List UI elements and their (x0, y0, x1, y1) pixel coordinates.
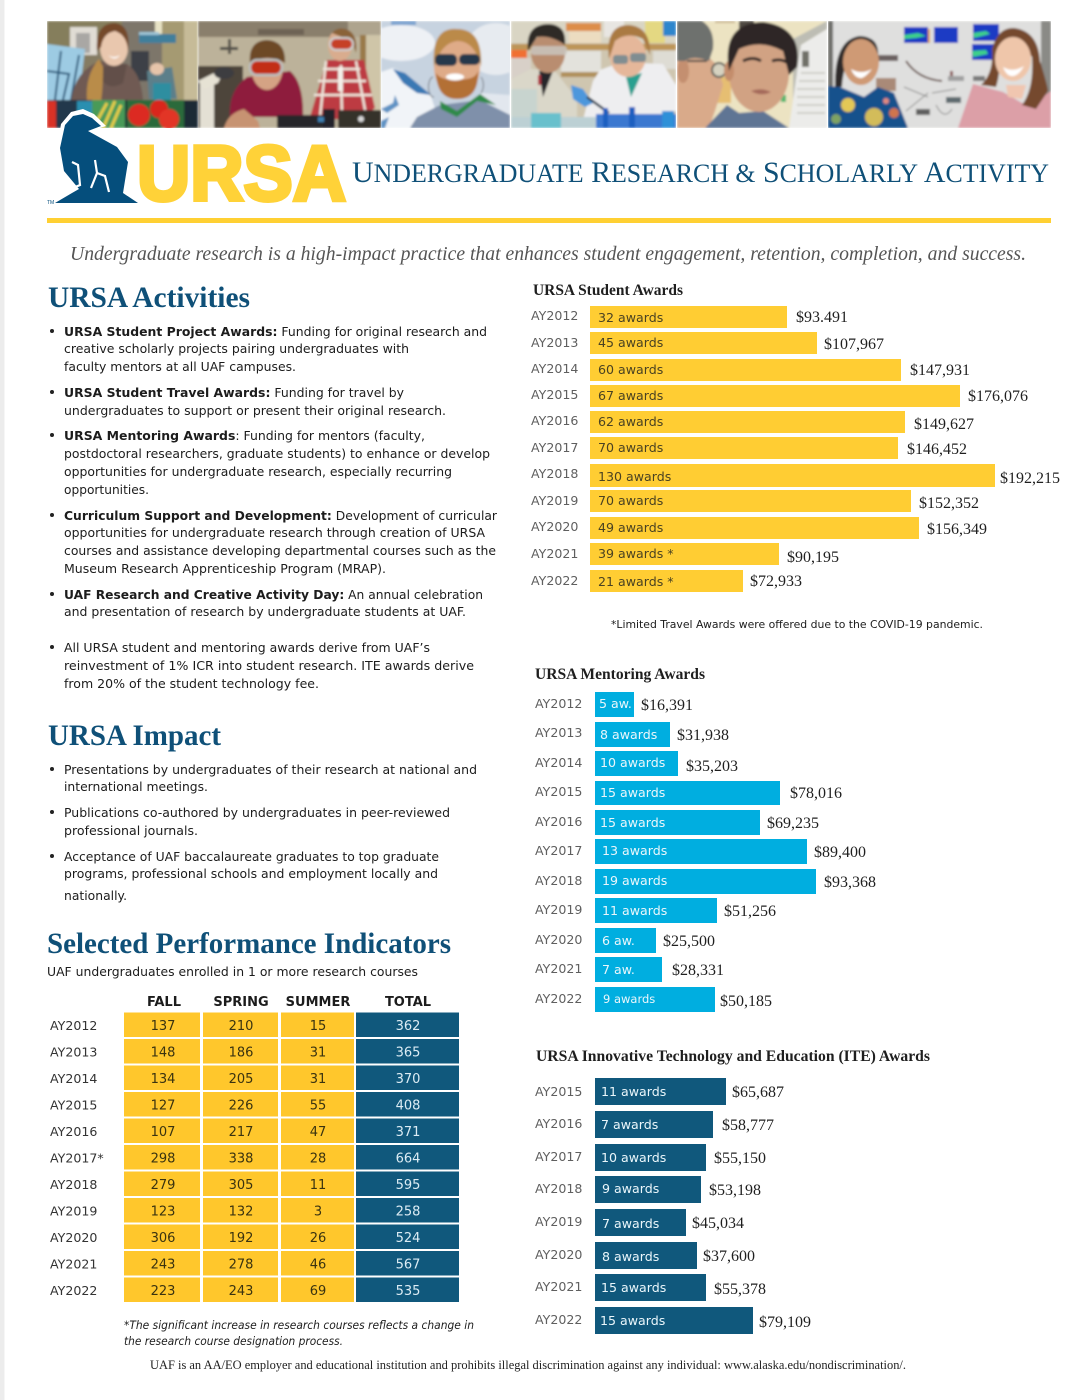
bar: AY2015: 67 awards (598, 388, 663, 403)
row: AY2016: 107 (151, 1125, 175, 1140)
bar: AY2018: AY2018 (535, 873, 582, 888)
bar: AY2020: 6 aw. (602, 933, 635, 948)
bar: AY2022: 21 awards * (598, 574, 674, 589)
bar: AY2022: 9 awards (603, 992, 655, 1006)
bar: AY2022: AY2022 (531, 573, 578, 588)
bar: AY2019: AY2019 (535, 1214, 582, 1229)
row: AY2018: AY2018 (50, 1177, 97, 1192)
bar: AY2021 (531, 543, 839, 566)
bar: AY2015 (535, 1078, 784, 1105)
bullet: Mentoring Awards: opportunities for undergraduate research, especially recurring (64, 464, 452, 479)
bar: AY2019 (531, 490, 979, 512)
bullet: funding sources (50, 640, 474, 691)
row: AY2019: 132 (229, 1204, 253, 1220)
bar: AY2014: $35,203 (686, 758, 738, 775)
heading: URSA Impact: URSA Impact (48, 719, 221, 752)
row: AY2018: 305 (229, 1178, 253, 1193)
table header: TOTAL (385, 995, 431, 1010)
bar: AY2021: AY2021 (535, 1279, 582, 1294)
photo: mentor and student talking (677, 21, 827, 128)
tagline: Undergraduate research is a high-impact practice that enhances student engagement, retention, completion, and success. (70, 243, 1026, 265)
bar: AY2020: $25,500 (663, 933, 715, 950)
bar: AY2018: $93,368 (824, 874, 876, 891)
bar: AY2012 (535, 692, 693, 717)
row: AY2021: 243 (151, 1258, 175, 1272)
bar: AY2022: AY2022 (535, 1312, 582, 1327)
row: AY2016: 371 (396, 1125, 420, 1140)
row: AY2015: AY2015 (50, 1098, 97, 1112)
table header: SUMMER (286, 995, 350, 1010)
row: AY2012: 15 (310, 1019, 326, 1034)
bullet: Student Project Awards: faculty mentors at all UAF campuses. (64, 359, 296, 374)
bar: AY2022 (535, 1307, 811, 1334)
row: AY2020: 524 (396, 1231, 420, 1246)
yellow header rule (47, 218, 1051, 223)
bar: AY2021: 39 awards * (598, 546, 674, 561)
photo: two students at a research poster (828, 21, 1051, 128)
bar: AY2022 (531, 570, 802, 592)
bar: AY2019: 70 awards (598, 493, 663, 508)
bullet: Curriculum Support and Development (50, 508, 498, 576)
bullet: presentations: international meetings. (64, 779, 208, 794)
bullet: publications: professional journals. (64, 823, 198, 838)
bar: AY2017 (535, 1144, 766, 1171)
row: AY2012: 210 (229, 1019, 253, 1034)
table header (147, 995, 431, 1010)
bar: AY2018: 19 awards (602, 873, 667, 888)
bullet: funding sources: reinvestment of 1% ICR into student research. ITE awards derive (64, 658, 474, 673)
bar: AY2020: AY2020 (535, 1247, 582, 1262)
row: AY2014: 31 (310, 1072, 326, 1087)
bar: AY2015: 15 awards (600, 785, 665, 800)
row: AY2021: AY2021 (50, 1256, 97, 1272)
row: AY2017 (50, 1145, 459, 1170)
table header: FALL (147, 995, 181, 1010)
row: AY2021 (50, 1251, 459, 1276)
bullet: Student Travel Awards (50, 385, 446, 418)
row: AY2015: 127 (151, 1098, 175, 1114)
bar: AY2017: 70 awards (598, 440, 663, 455)
subheading: enrollment table caption: UAF undergraduates enrolled in 1 or more research courses (47, 964, 418, 979)
bar: AY2012: $93.491 (796, 309, 848, 326)
bullet: Mentoring Awards: postdoctoral researchers, graduate students) to enhance or develop (64, 446, 490, 461)
bar: AY2019 (535, 1209, 744, 1236)
bar: AY2017: AY2017 (531, 440, 578, 455)
row: AY2020: 26 (310, 1231, 326, 1246)
bar: AY2016: AY2016 (535, 1116, 582, 1131)
bar: AY2012: 5 aw. (599, 696, 632, 711)
bar: AY2012: AY2012 (531, 308, 578, 323)
row: AY2020: 306 (151, 1231, 175, 1246)
row: AY2016: AY2016 (50, 1124, 97, 1139)
bar: AY2020 (531, 517, 987, 539)
row: AY2015: 226 (229, 1098, 253, 1114)
bar: AY2022: $79,109 (759, 1314, 811, 1331)
bar: AY2014: AY2014 (531, 361, 578, 376)
row: AY2013 (50, 1039, 459, 1064)
bar: AY2018 (535, 869, 876, 894)
bar: AY2019: $45,034 (692, 1215, 744, 1232)
bar: AY2020: AY2020 (531, 519, 578, 534)
chart: URSA ITE Awards (535, 1048, 930, 1334)
row: AY2015: 408 (396, 1098, 420, 1114)
photo: student artist with paintings (47, 21, 198, 128)
bar: AY2014: 10 awards (600, 755, 665, 770)
bullet: graduate acceptance (50, 849, 439, 903)
chart title: URSA Innovative Technology and Education (ITE) Awards (536, 1048, 930, 1065)
table footnote: the research course designation process. (124, 1334, 343, 1348)
bar: AY2020: 49 awards (598, 520, 663, 535)
bar: AY2013 (535, 722, 729, 747)
chart: URSA Student Awards (531, 282, 1060, 631)
bullet: Mentoring Awards: opportunities. (64, 482, 149, 497)
row: AY2022: 535 (396, 1284, 420, 1299)
bar: AY2017: 10 awards (601, 1150, 666, 1165)
row: AY2017: 338 (229, 1152, 253, 1166)
bar: AY2017: $55,150 (714, 1150, 766, 1167)
bar: AY2019: AY2019 (531, 493, 578, 508)
bar: AY2015: AY2015 (535, 784, 582, 799)
bar: AY2013: $31,938 (677, 727, 729, 744)
row: AY2016: 217 (229, 1125, 253, 1140)
bullet: presentations: Presentations by undergraduates of their research at national and (64, 762, 477, 777)
bullet: graduate acceptance: programs, professional schools and employment locally and (64, 866, 438, 881)
bar: AY2015: $176,076 (968, 388, 1028, 405)
photo: two students in lab goggles (198, 21, 381, 128)
bar: AY2016 (535, 810, 819, 835)
bar: AY2015 (531, 385, 1028, 407)
bullet: presentations (50, 762, 477, 794)
bullet: Curriculum Support and Development: Museum Research Apprenticeship Program (MRAP). (64, 561, 386, 576)
bullet: Curriculum Support and Development: Curriculum Support and Development: Development of curricular (64, 508, 498, 523)
bar: AY2016: $58,777 (722, 1117, 774, 1134)
panel: URSA Activities (48, 281, 498, 691)
bar: AY2021: $55,378 (714, 1281, 766, 1298)
row: AY2017: 28 (310, 1152, 326, 1166)
row: AY2013: AY2013 (50, 1044, 97, 1060)
table: research course enrollment (50, 995, 459, 1302)
bar: AY2022 (535, 987, 772, 1012)
bar: AY2021: $28,331 (672, 962, 724, 979)
bar: AY2017 (531, 437, 967, 459)
bar: AY2019: 7 awards (602, 1216, 659, 1231)
bullet: Curriculum Support and Development: courses and assistance developing departmental courses such as the (64, 543, 496, 558)
bar: AY2016: AY2016 (531, 413, 578, 428)
row: AY2019: 123 (151, 1204, 175, 1220)
row: AY2018: 595 (396, 1178, 420, 1193)
bar: AY2020 (535, 928, 715, 953)
row: AY2022 (50, 1278, 459, 1302)
bar: AY2015: AY2015 (531, 387, 578, 402)
table header: SPRING (213, 995, 269, 1010)
bar: AY2021: AY2021 (535, 961, 582, 976)
chart footnote: *Limited Travel Awards were offered due to the COVID-19 pandemic. (611, 618, 983, 631)
bar: AY2016: $69,235 (767, 815, 819, 832)
row: AY2018 (50, 1172, 459, 1196)
bar: AY2017: AY2017 (535, 843, 582, 858)
bar: AY2018: $53,198 (709, 1182, 761, 1199)
bar: AY2015: $65,687 (732, 1084, 784, 1101)
row: AY2020: 192 (229, 1231, 253, 1246)
row: AY2022: 243 (229, 1284, 253, 1299)
row: AY2013: 365 (396, 1046, 420, 1060)
chart title: URSA Student Awards (533, 282, 683, 299)
photo: two researchers pipetting in a lab (511, 21, 676, 128)
bar: AY2019 (535, 898, 776, 923)
logo: URSA bear and wordmark (47, 109, 346, 217)
row: AY2012 (50, 1012, 459, 1037)
bar: AY2021 (535, 957, 724, 982)
bar: AY2016: 7 awards (601, 1117, 658, 1132)
footer: nondiscrimination statement: UAF is an AA/EO employer and educational institution and prohibits illegal discrimination against any individual: www.alaska.edu/nondiscrimination/. (150, 1358, 906, 1372)
bar: AY2014: 60 awards (598, 362, 663, 377)
bar: AY2017: 13 awards (602, 843, 667, 858)
bar: AY2013: 8 awards (600, 727, 657, 742)
bar: AY2017 (535, 839, 866, 864)
bar: AY2018: 9 awards (602, 1181, 659, 1196)
bar: AY2017: AY2017 (535, 1149, 582, 1164)
bar: AY2022: AY2022 (535, 991, 582, 1006)
bar: AY2019: AY2019 (535, 902, 582, 917)
bar: AY2020: 8 awards (602, 1249, 659, 1264)
row: AY2017: 664 (396, 1152, 420, 1166)
bar: AY2016: AY2016 (535, 814, 582, 829)
row: AY2019: 3 (314, 1204, 322, 1220)
bar: AY2014: AY2014 (535, 755, 582, 770)
bullet: Mentoring Awards (50, 428, 490, 497)
bar: AY2018: $192,215 (1000, 470, 1060, 487)
row: AY2015: 55 (310, 1098, 326, 1114)
row: AY2014: 370 (396, 1072, 420, 1087)
row: AY2013: 148 (151, 1046, 175, 1060)
row: AY2014: AY2014 (50, 1071, 97, 1086)
trademark mark: TM (47, 200, 54, 206)
row: AY2021: 567 (396, 1258, 420, 1272)
row: AY2019: AY2019 (50, 1204, 97, 1218)
bar: AY2012: AY2012 (535, 696, 582, 711)
bar: AY2017: $146,452 (907, 441, 967, 458)
bullet: Research and Creative Activity Day: UAF Research and Creative Activity Day: An annual celebration (64, 587, 483, 602)
bar: AY2014 (535, 751, 738, 776)
bar: AY2022: $50,185 (720, 993, 772, 1010)
row: AY2020: AY2020 (50, 1230, 97, 1245)
bar: AY2015: $78,016 (790, 785, 842, 802)
bar: AY2019: $152,352 (919, 495, 979, 512)
table footnote: *The significant increase in research courses reflects a change in (124, 1318, 474, 1332)
bar: AY2013 (531, 332, 884, 354)
bar: AY2016 (535, 1111, 774, 1138)
bullet: graduate acceptance: Acceptance of UAF baccalaureate graduates to top graduate (64, 849, 439, 864)
bar: AY2013: $107,967 (824, 336, 884, 353)
bar: AY2016: $149,627 (914, 416, 974, 433)
row: AY2013: 31 (310, 1046, 326, 1060)
row: AY2012: AY2012 (50, 1018, 97, 1033)
bullet: Student Project Awards (50, 324, 487, 374)
bar: AY2019: $51,256 (724, 903, 776, 920)
wordmark: URSA: URSA (137, 129, 346, 217)
bar: AY2014 (531, 359, 970, 381)
bar: AY2021 (535, 1274, 766, 1301)
row: AY2021: 46 (310, 1258, 326, 1272)
panel: Selected Performance Indicators (47, 927, 474, 1348)
bar: AY2014: $147,931 (910, 362, 970, 379)
bullet: funding sources: from 20% of the student technology fee. (64, 676, 319, 691)
bar: AY2018 (535, 1176, 761, 1203)
bar: AY2012: 32 awards (598, 310, 663, 325)
bullet: Student Project Awards: creative scholarly projects pairing undergraduates with (64, 341, 409, 356)
icon: polar bear (52, 109, 142, 204)
row: AY2016 (50, 1118, 459, 1143)
bar: AY2020 (535, 1242, 755, 1269)
bar: AY2013: AY2013 (531, 335, 578, 350)
bar: AY2021: 7 aw. (602, 962, 635, 977)
bar: AY2021: 15 awards (601, 1280, 666, 1295)
bar: AY2016: 62 awards (598, 414, 663, 429)
row: AY2019: 258 (396, 1204, 420, 1220)
panel: URSA Impact (48, 719, 477, 903)
row: AY2022: AY2022 (50, 1283, 97, 1298)
bar: AY2015: AY2015 (535, 1084, 582, 1099)
bullet: graduate acceptance: nationally. (64, 888, 127, 903)
row: AY2013: 186 (229, 1046, 253, 1060)
heading: URSA Activities: URSA Activities (48, 281, 250, 314)
row: AY2014: 205 (229, 1072, 253, 1087)
bullet: publications: Publications co-authored by undergraduates in peer-reviewed (64, 805, 450, 820)
bar: AY2013: AY2013 (535, 725, 582, 740)
bar: AY2018: AY2018 (535, 1181, 582, 1196)
table footnote (124, 1318, 474, 1348)
bullet: Student Travel Awards: URSA Student Travel Awards: Funding for travel by (64, 385, 405, 400)
bar: AY2015 (535, 781, 842, 805)
bar: AY2016: 15 awards (600, 815, 665, 830)
bullet: publications (50, 805, 450, 838)
row: AY2014: 134 (151, 1072, 175, 1087)
photo: smiling man with mountain behind (381, 21, 510, 128)
bullet: Student Travel Awards: undergraduates to support or present their original research. (64, 403, 446, 418)
row: AY2017: 298 (151, 1152, 175, 1166)
bar: AY2015: 11 awards (601, 1084, 666, 1099)
bar: AY2018 (531, 464, 1060, 487)
bar: AY2020: $156,349 (927, 521, 987, 538)
bar: AY2022: $72,933 (750, 573, 802, 590)
bar: AY2022: 15 awards (600, 1313, 665, 1328)
row: AY2018: 11 (310, 1178, 326, 1193)
bar: AY2012 (531, 306, 848, 328)
bullet: Research and Creative Activity Day: and presentation of research by undergraduate students at UAF. (64, 604, 466, 619)
bar: AY2021: AY2021 (531, 546, 578, 561)
row: AY2020 (50, 1224, 459, 1249)
bar: AY2019: 11 awards (602, 903, 667, 918)
bullet: Curriculum Support and Development: opportunities for undergraduate research through creation of URSA (64, 525, 485, 540)
bar: AY2020: AY2020 (535, 932, 582, 947)
chart: URSA Mentoring Awards (535, 666, 876, 1012)
row: AY2012: 362 (396, 1019, 420, 1034)
bullet: Research and Creative Activity Day (50, 587, 483, 619)
row: AY2012: 137 (151, 1019, 175, 1034)
bullet: Mentoring Awards: URSA Mentoring Awards: Funding for mentors (faculty, (64, 428, 425, 443)
bar: AY2012: $16,391 (641, 697, 693, 714)
heading: Selected Performance Indicators: Selected Performance Indicators (47, 927, 451, 960)
bar: AY2020: $37,600 (703, 1248, 755, 1265)
bullet: Student Project Awards: URSA Student Project Awards: Funding for original research and (64, 324, 487, 339)
bar: AY2017: $89,400 (814, 844, 866, 861)
row: AY2021: 278 (229, 1258, 253, 1272)
bar: AY2018: 130 awards (598, 469, 671, 484)
title: program name: UNDERGRADUATE RESEARCH & SCHOLARLY ACTIVITY (352, 156, 1049, 189)
row: AY2022: 69 (310, 1284, 326, 1299)
chart title: URSA Mentoring Awards (535, 666, 705, 683)
row: AY2015 (50, 1092, 459, 1116)
bar: AY2018: AY2018 (531, 466, 578, 481)
row: AY2019 (50, 1198, 459, 1222)
row: AY2018: 279 (151, 1178, 175, 1193)
bullet: funding sources: All URSA student and mentoring awards derive from UAF’s (64, 640, 430, 655)
row: AY2014 (50, 1066, 459, 1090)
row: AY2016: 47 (310, 1125, 326, 1140)
row: AY2017: AY2017* (50, 1150, 104, 1166)
bar: AY2021: $90,195 (787, 549, 839, 566)
row: AY2022: 223 (151, 1284, 175, 1299)
bar: AY2013: 45 awards (598, 335, 663, 350)
bar: AY2016 (531, 411, 974, 433)
